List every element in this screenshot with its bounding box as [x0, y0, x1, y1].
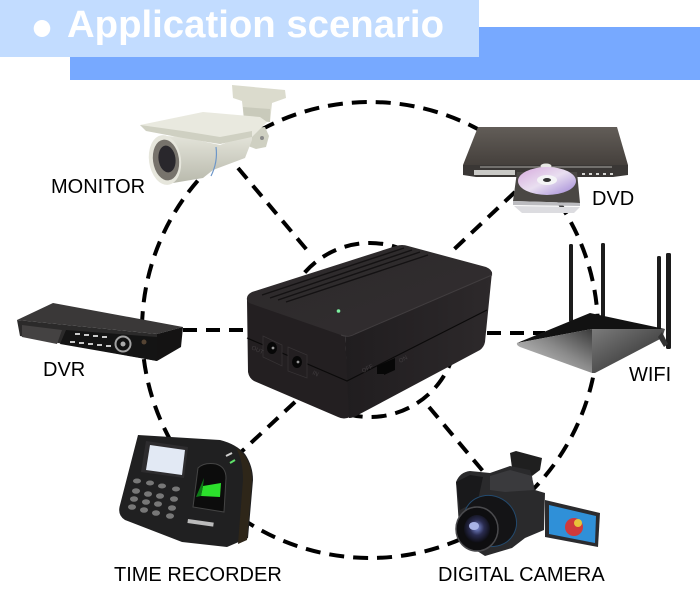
keypad [128, 478, 180, 519]
antennas [569, 243, 671, 349]
faint port legends: IN [311, 370, 319, 378]
status lights [226, 453, 232, 456]
label plate [187, 519, 214, 527]
header band: blue bar [70, 27, 700, 80]
status LED [337, 309, 340, 313]
device: digital camera [454, 451, 600, 556]
header band: light panel [0, 0, 479, 57]
outer dashed ring [142, 102, 598, 558]
inner dashed ring [283, 243, 457, 417]
dashed spokes [183, 168, 545, 489]
label: WIFI: WIFI [629, 364, 671, 386]
label: MONITOR: MONITOR [51, 176, 145, 198]
screen [141, 441, 188, 478]
device: power supply box [247, 245, 492, 418]
label: DVD: DVD [592, 188, 634, 210]
faint port legends: OUT [250, 345, 264, 356]
device: DVD player [463, 127, 628, 213]
lens [146, 133, 184, 187]
prism [510, 451, 542, 476]
faint port legends: OFF [361, 364, 375, 375]
DVR controls [70, 333, 111, 347]
disc [518, 167, 576, 195]
hood [140, 112, 267, 144]
DVR vents [22, 325, 62, 344]
body [165, 133, 252, 183]
seam line [247, 310, 487, 381]
label: DIGITAL CAMERA: DIGITAL CAMERA [438, 564, 605, 586]
device: time recorder [119, 435, 253, 547]
DVR top [17, 303, 183, 334]
box top face [247, 245, 492, 336]
box right face [345, 272, 492, 418]
blue stripe [211, 147, 216, 176]
DC jacks [263, 336, 307, 378]
flip screen [545, 500, 600, 547]
disc tray [513, 172, 580, 203]
title: Application scenario [67, 4, 444, 46]
body [456, 466, 545, 556]
front panel buttons [582, 173, 613, 175]
device: security camera [140, 85, 286, 187]
mount [232, 85, 286, 122]
device: DVR [17, 303, 183, 361]
lens front [456, 507, 498, 551]
box front-left face [247, 300, 350, 418]
router right facet [592, 329, 665, 373]
label: DVR: DVR [43, 359, 85, 381]
faint port legends [250, 345, 409, 378]
faint port legends: ON [398, 355, 409, 365]
arm [248, 127, 269, 149]
lens barrel [454, 486, 526, 556]
label: TIME RECORDER: TIME RECORDER [114, 564, 282, 586]
ridges [262, 248, 428, 302]
fingerprint reader [193, 464, 226, 512]
DVR right side [157, 327, 183, 361]
router left facet [517, 329, 592, 373]
router top rear [517, 313, 665, 343]
slide switch [377, 358, 395, 375]
DVR control panel [60, 330, 157, 361]
device: WiFi router [517, 243, 671, 373]
DVR front [17, 320, 157, 361]
